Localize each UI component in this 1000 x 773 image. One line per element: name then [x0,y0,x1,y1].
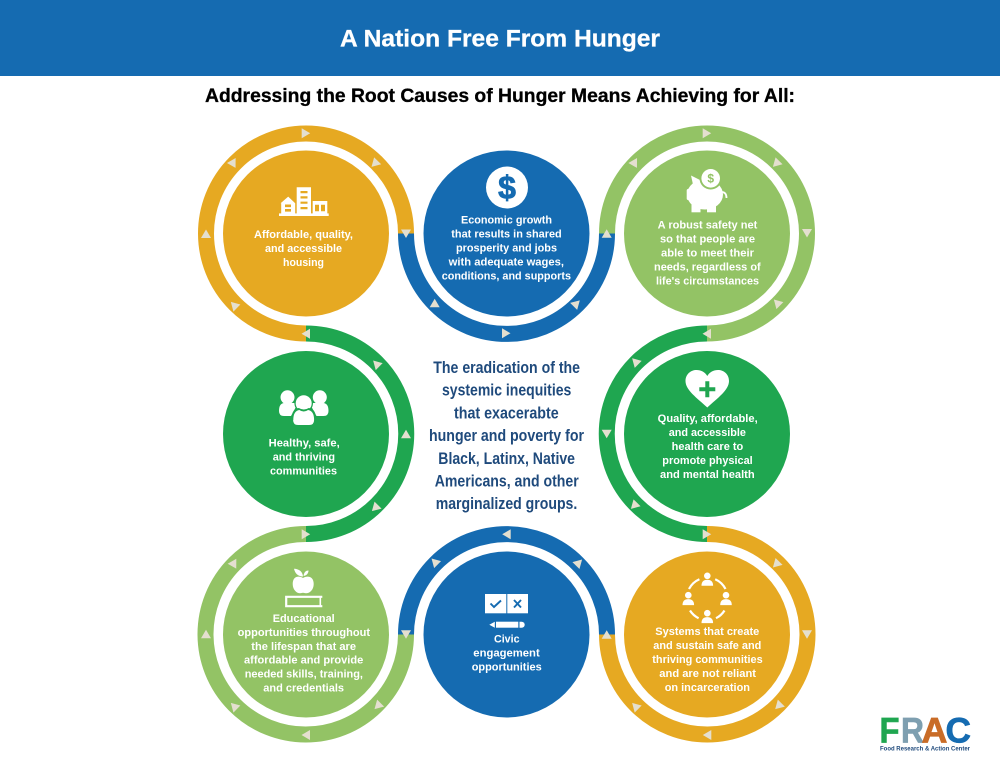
text: communities [269,437,340,477]
logo: FRAC: R [901,712,924,751]
text: safety net: able to meet their [661,248,755,260]
text: economic growth: with adequate wages, [448,256,564,268]
title: A Nation Free From Hunger [340,26,660,52]
text: economic growth: prosperity and jobs [456,242,557,254]
text: safety net: life's circumstances [656,276,759,288]
text: safe systems: and are not reliant [659,668,756,680]
text: housing [254,229,353,269]
text: housing: housing [283,257,324,269]
text: education: opportunities throughout [238,627,370,639]
ring: safety net [607,134,807,334]
logo: FRAC: C [946,712,971,751]
ring: communities [306,334,406,534]
disc: health care [624,351,790,517]
disc: safe systems [624,552,790,718]
ring: economic growth [406,234,607,334]
logo: FRAC: A [922,712,948,751]
icon: ballot and pencil [485,594,528,628]
text: safe systems: thriving communities [652,654,763,666]
icon: piggy bank: $ [707,172,714,186]
text: civic engagement: engagement [473,648,540,660]
center statement: hunger and poverty for [429,426,584,445]
text: health care: promote physical [662,455,753,467]
text: economic growth: Economic growth [461,214,552,226]
text: safety net: so that people are [660,234,755,246]
arrows: safe systems [632,557,812,740]
text: health care: and mental health [660,469,755,481]
center statement: systemic inequities [442,381,571,400]
ring: education [206,534,406,734]
text: civic engagement [472,633,542,674]
arrows: economic growth [430,299,582,338]
icon: apple on book [286,569,322,606]
arrows: safety net [628,128,812,309]
text: communities: communities [270,465,337,477]
panel: health care [602,334,790,534]
center statement: Black, Latinx, Native [438,449,575,468]
text: safe systems: Systems that create [655,626,759,638]
icon: group of people [279,390,328,426]
disc: civic engagement [424,552,590,718]
text: health care: Quality, affordable, [658,413,758,425]
disc: safety net [624,150,790,316]
ring: health care [607,334,707,534]
panel: safe systems [607,534,812,740]
arrows at ring joins [302,229,711,639]
text: health care: health care to [672,441,744,453]
text: education: needed skills, training, [245,669,363,681]
center statement: Americans, and other [435,472,579,490]
text: communities: Healthy, safe, [269,437,340,449]
text: safety net: needs, regardless of [654,262,761,274]
text: education [238,613,370,695]
text: health care [658,413,758,481]
text: safe systems: and sustain safe and [653,640,761,652]
subtitle heading: Addressing the Root Causes of Hunger Means Achieving for All: [205,86,795,107]
text: economic growth: that results in shared [451,228,562,240]
header banner [0,0,1000,76]
arrows: communities [370,358,411,511]
text: economic growth [442,214,571,282]
text: safe systems [652,626,763,694]
panel: civic engagement [406,529,607,718]
text: education: the lifespan that are [251,641,356,653]
icon: dollar coin [486,166,528,208]
text: civic engagement: Civic [494,633,520,645]
text: health care: and accessible [669,427,746,439]
center statement: The eradication of the [433,358,580,377]
arrows: civic engagement [432,529,584,570]
panel: housing [201,128,406,334]
text: housing: Affordable, quality, [254,229,353,241]
logo: FRAC: F [880,712,900,751]
text: civic engagement: opportunities [472,662,542,674]
center statement: marginalized groups. [436,494,577,513]
icon: piggy bank [687,167,726,212]
text: education: and credentials [263,683,344,695]
text: safety net [654,220,761,288]
panel: economic growth [406,150,607,338]
panel: safety net [607,128,812,334]
logo: FRAC: Food Research & Action Center [880,745,970,752]
center statement [429,358,584,513]
text: safe systems: on incarceration [665,682,750,694]
text: housing: and accessible [265,243,342,255]
text: safety net: A robust safety net [658,220,758,232]
icon: dollar coin: $ [498,170,516,206]
disc: economic growth [424,150,590,316]
text: education: Educational [273,613,335,625]
icon: buildings [279,187,329,216]
panel: education [201,534,406,740]
ring: civic engagement [406,534,607,634]
icon: heart with cross [686,370,729,408]
text: economic growth: conditions, and supports [442,270,571,282]
center statement: that exacerabte [454,403,559,422]
disc: education [223,552,389,718]
arrows: health care [602,356,643,509]
ring: housing [206,134,406,334]
disc: housing [223,150,389,316]
disc: communities [223,351,389,517]
logo: FRAC [880,712,971,752]
panel: communities [223,334,411,534]
ring: safe systems [607,534,807,734]
text: education: affordable and provide [244,655,363,667]
text: communities: and thriving [273,451,335,463]
arrows: education [201,559,384,740]
icon: circle of people [682,572,732,623]
arrows: housing [201,128,381,312]
